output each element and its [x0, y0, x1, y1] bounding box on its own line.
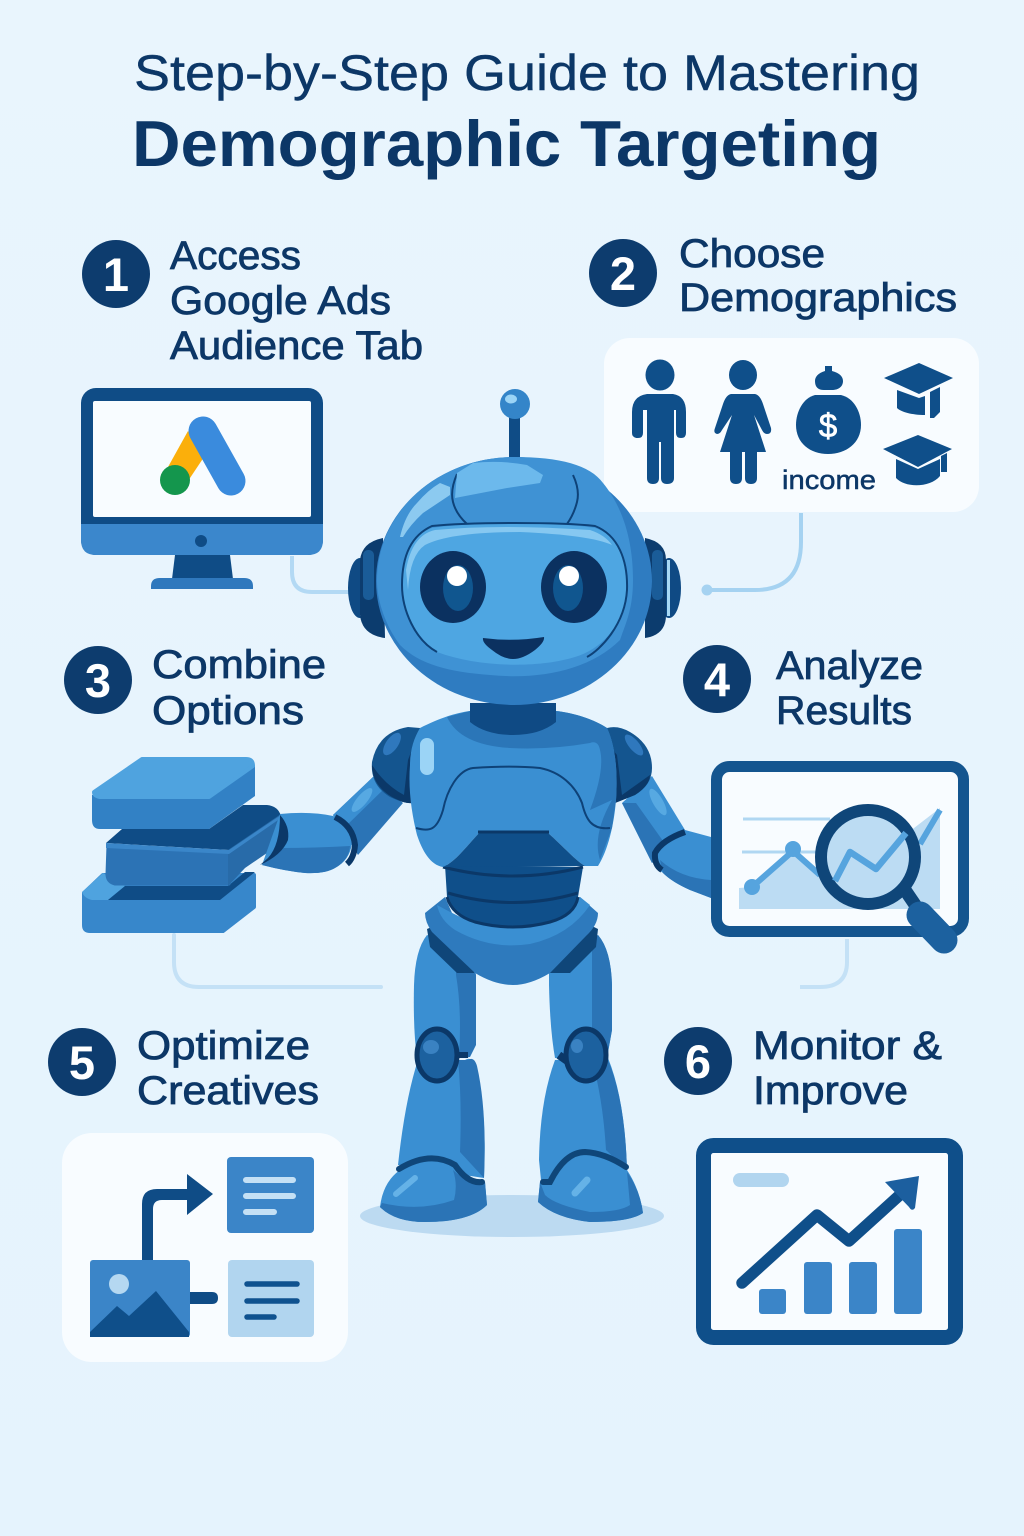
title: Step-by-Step Guide to Mastering — [134, 45, 920, 101]
connector: step 2 to robot — [704, 513, 801, 594]
step 3 heading: Options — [152, 689, 304, 733]
right leg — [538, 935, 643, 1222]
icon: graduation cap top — [884, 363, 953, 418]
step 3 heading: Combine — [152, 643, 326, 687]
shadow — [360, 1195, 664, 1237]
icon: graduation cap bottom — [883, 435, 952, 485]
hip joints — [427, 926, 598, 973]
step 1 heading: Google Ads — [170, 279, 391, 323]
visor — [402, 524, 627, 665]
robot — [260, 389, 711, 1237]
step 5 heading: Optimize — [137, 1024, 310, 1068]
step 4 heading — [683, 644, 923, 733]
step 6 heading: Monitor & — [753, 1024, 942, 1068]
icon: stacked blocks — [82, 759, 283, 931]
step 3 heading: 3 — [85, 654, 111, 707]
right shoulder — [607, 727, 652, 803]
left ear — [348, 538, 385, 638]
title — [132, 45, 920, 180]
connector: step 3 to robot — [174, 935, 381, 987]
step 2 heading: Choose — [679, 232, 825, 276]
panel: optimize creatives — [62, 1133, 348, 1362]
pelvis — [425, 897, 598, 985]
connector: step 4 to robot — [800, 939, 847, 987]
step 2 heading: 2 — [610, 247, 636, 300]
right arm — [622, 776, 711, 898]
left shoulder — [372, 727, 420, 803]
icon: arrow to headline card — [142, 1174, 213, 1260]
icon: man — [632, 360, 686, 484]
icon: woman — [714, 360, 771, 484]
left arm — [260, 777, 403, 873]
step 1 heading: Audience Tab — [170, 324, 423, 368]
icon: analytics board with magnifier — [716, 766, 964, 940]
neck — [470, 703, 556, 735]
step 1 heading — [82, 234, 423, 368]
step 6 heading: 6 — [685, 1035, 711, 1088]
step 4 heading: 4 — [704, 653, 730, 706]
waist segments — [443, 865, 583, 927]
icon: money bag — [796, 366, 861, 454]
step 5 heading: Creatives — [137, 1069, 319, 1113]
icon: light text card — [228, 1260, 314, 1337]
icon: growth chart board — [704, 1146, 956, 1338]
step 1 heading: 1 — [103, 248, 129, 301]
step 4 heading: Analyze — [776, 644, 923, 688]
icon: image card — [90, 1260, 218, 1337]
right eye — [541, 551, 607, 623]
left leg — [380, 935, 487, 1222]
step 1 heading: Access — [170, 234, 301, 278]
antenna — [500, 389, 530, 460]
panel: demographics — [604, 338, 979, 512]
step 6 heading: Improve — [753, 1069, 908, 1113]
label: income: income — [782, 465, 876, 495]
connector: step 1 to robot — [292, 556, 350, 592]
left eye — [420, 551, 486, 623]
step 2 heading — [589, 232, 957, 320]
icon: dark text card — [227, 1157, 314, 1233]
head — [348, 457, 681, 705]
torso — [409, 711, 617, 867]
step 6 heading — [664, 1024, 942, 1113]
step 4 heading: Results — [776, 689, 912, 733]
step 3 heading — [64, 643, 326, 733]
step 2 heading: Demographics — [679, 276, 957, 320]
icon: desktop monitor with Google Ads logo — [81, 388, 323, 589]
right ear — [645, 538, 681, 638]
mouth — [483, 637, 544, 659]
helmet panel — [452, 474, 578, 524]
title: Demographic Targeting — [132, 107, 881, 180]
step 5 heading — [48, 1024, 319, 1113]
step 5 heading: 5 — [69, 1036, 95, 1089]
icon: money bag: $ — [819, 407, 837, 444]
